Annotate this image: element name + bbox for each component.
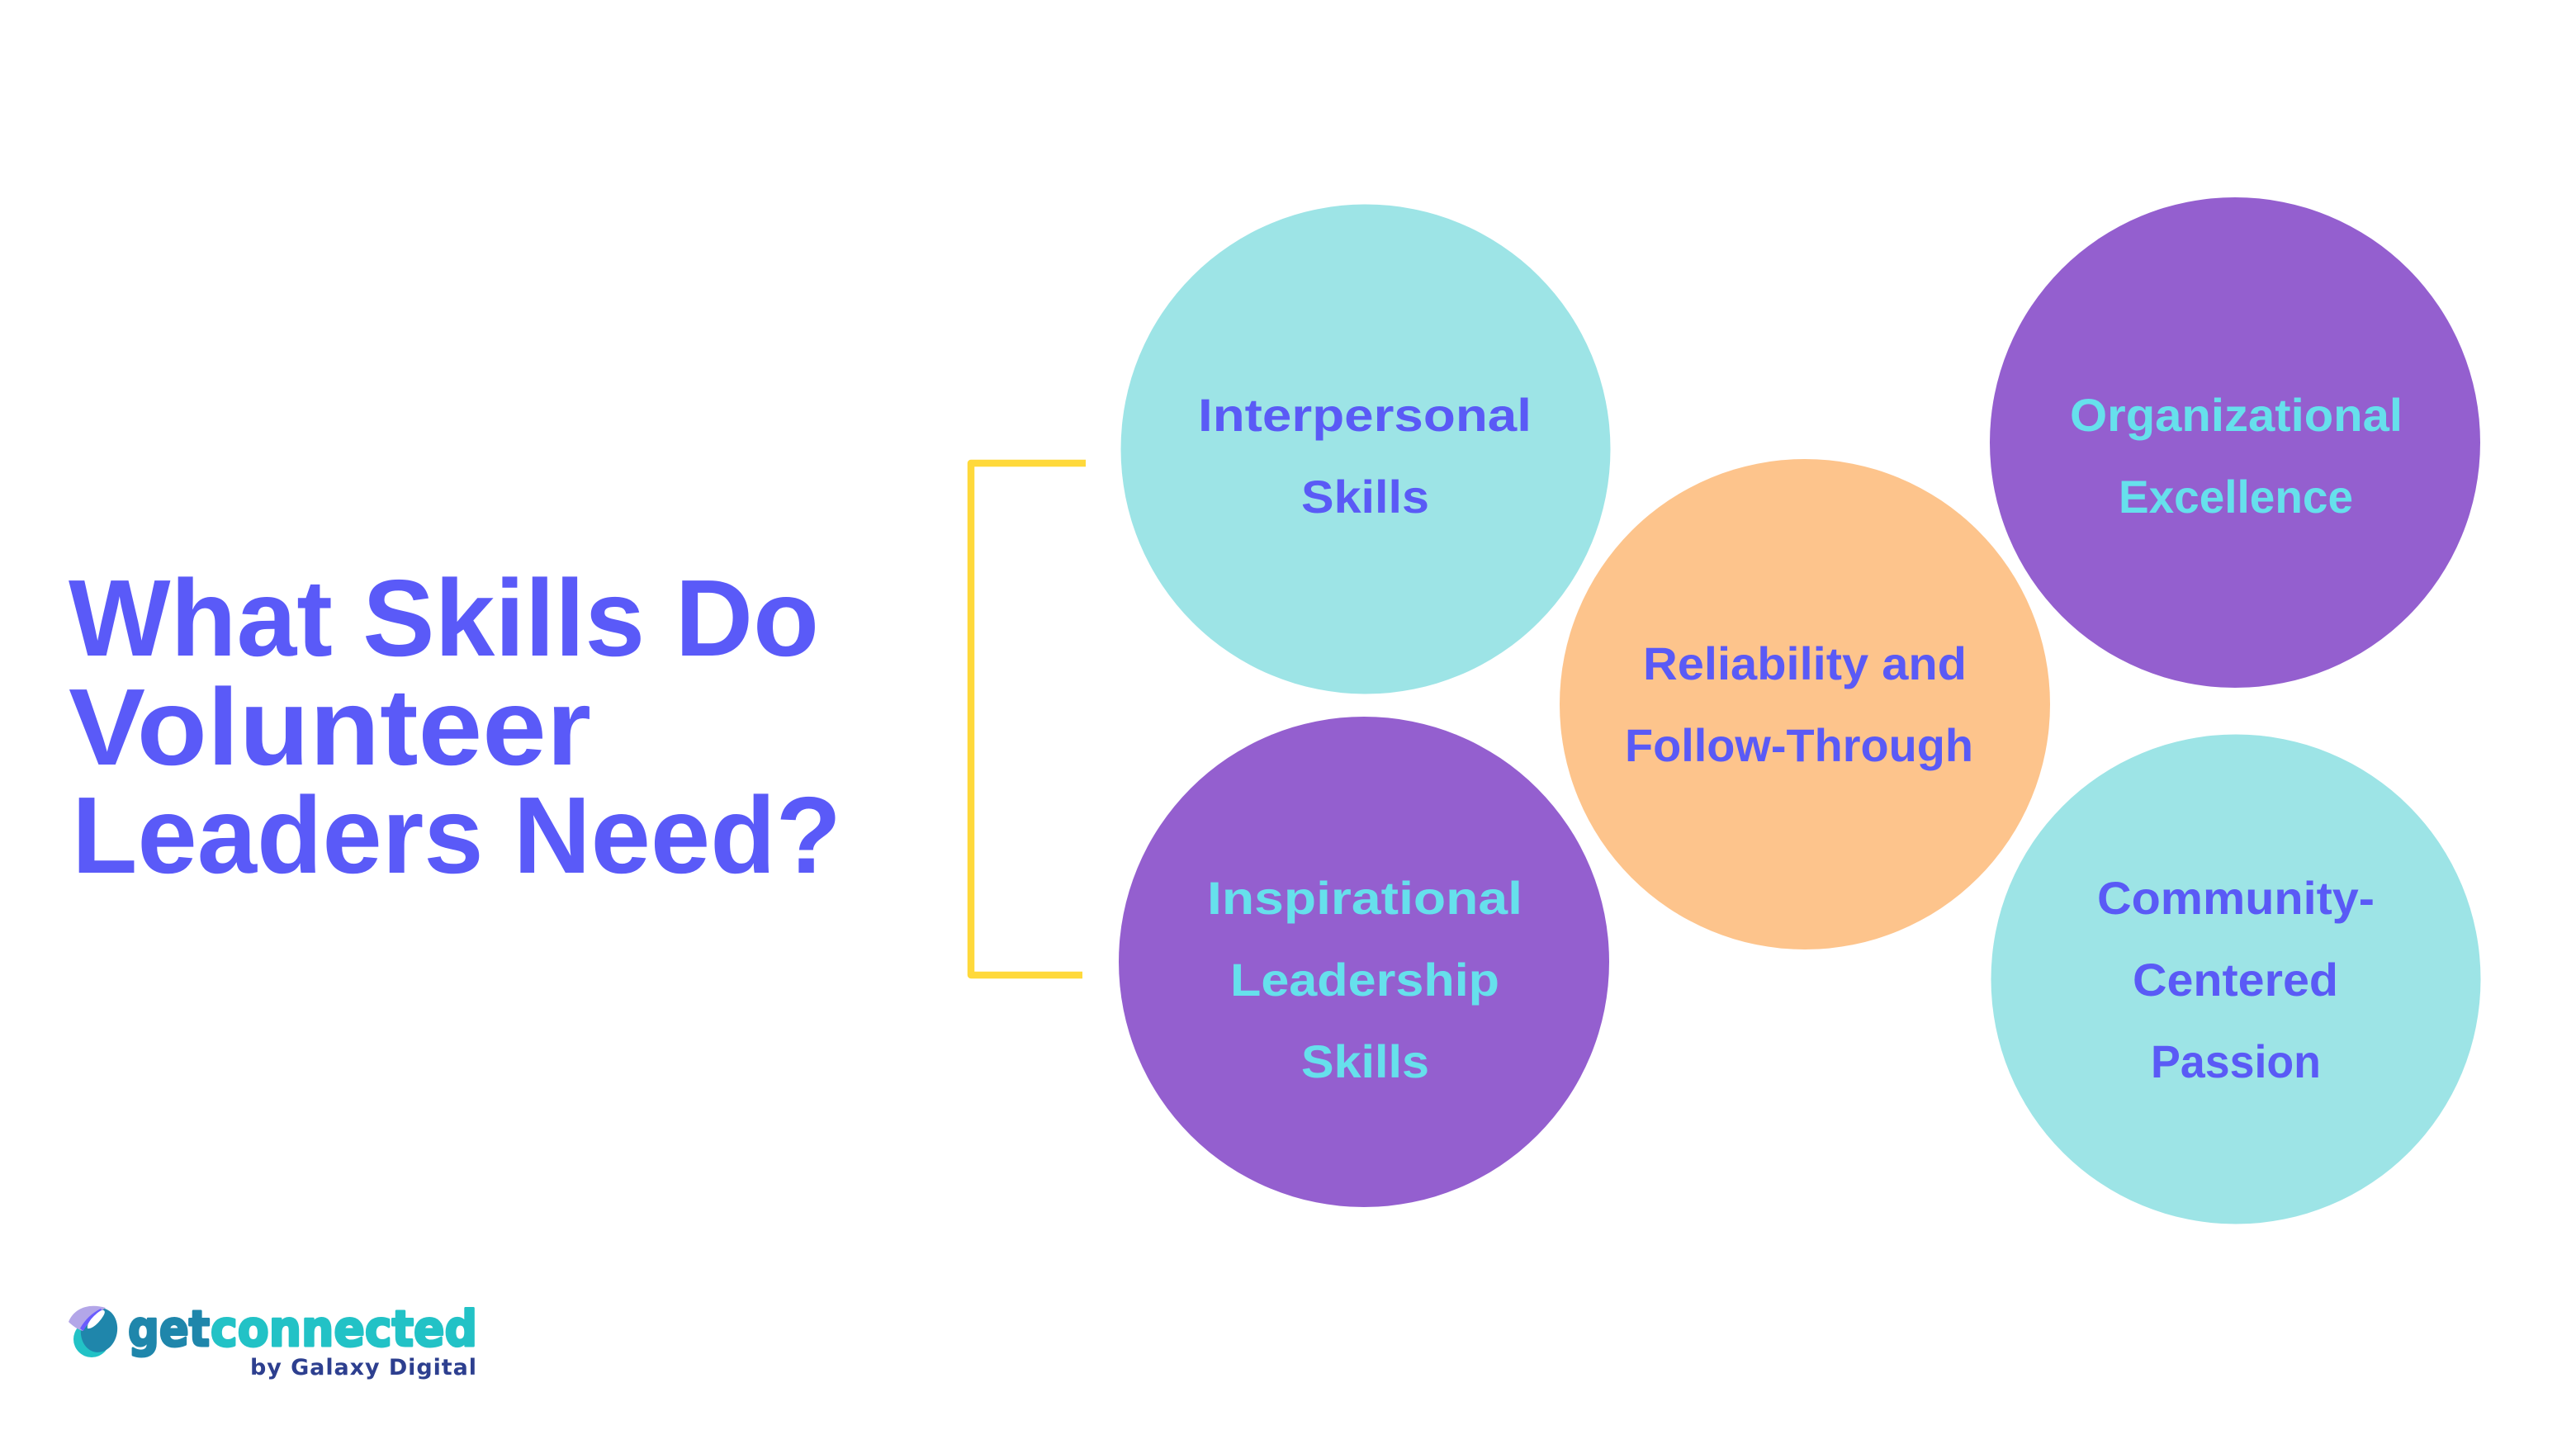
- circle: Interpersonal Skills: Interpersonal: [1198, 389, 1532, 441]
- circle: Inspirational Leadership Skills: [1119, 717, 1609, 1207]
- bracket connector: [971, 463, 1086, 975]
- circle: Interpersonal Skills: [1121, 205, 1610, 694]
- title: Volunteer: [69, 666, 591, 788]
- circle: Organizational Excellence: Organizational: [2070, 389, 2403, 441]
- logo: getconnected by Galaxy Digital: connected: [211, 1300, 477, 1358]
- circle: Organizational Excellence: Excellence: [2119, 471, 2353, 523]
- circle: Community-Centered Passion: Centered: [2133, 954, 2338, 1006]
- logo: getconnected by Galaxy Digital: [69, 1300, 477, 1380]
- circle: Community-Centered Passion: [1991, 735, 2480, 1224]
- circle: Inspirational Leadership Skills: Skills: [1301, 1035, 1429, 1087]
- circle: Reliability and Follow-Through: Follow-Through: [1625, 719, 1973, 771]
- circle: Inspirational Leadership Skills: Inspirational: [1207, 872, 1522, 924]
- circle: Community-Centered Passion: Community-: [2097, 872, 2375, 924]
- circle: Interpersonal Skills: Skills: [1301, 471, 1429, 523]
- logo: getconnected by Galaxy Digital: get: [128, 1300, 210, 1358]
- logo: getconnected by Galaxy Digital: by Galaxy Digital: [250, 1355, 476, 1380]
- circle: Reliability and Follow-Through: Reliability and: [1643, 637, 1967, 689]
- circle: Reliability and Follow-Through: [1560, 459, 2050, 949]
- icon: logo mark: [69, 1305, 121, 1357]
- circle: Community-Centered Passion: Passion: [2151, 1035, 2321, 1087]
- title: What Skills Do: [69, 557, 819, 679]
- circle: Inspirational Leadership Skills: Leadership: [1230, 954, 1499, 1006]
- title: Leaders Need?: [72, 774, 841, 896]
- title: [69, 557, 841, 896]
- circle: Organizational Excellence: [1990, 197, 2480, 688]
